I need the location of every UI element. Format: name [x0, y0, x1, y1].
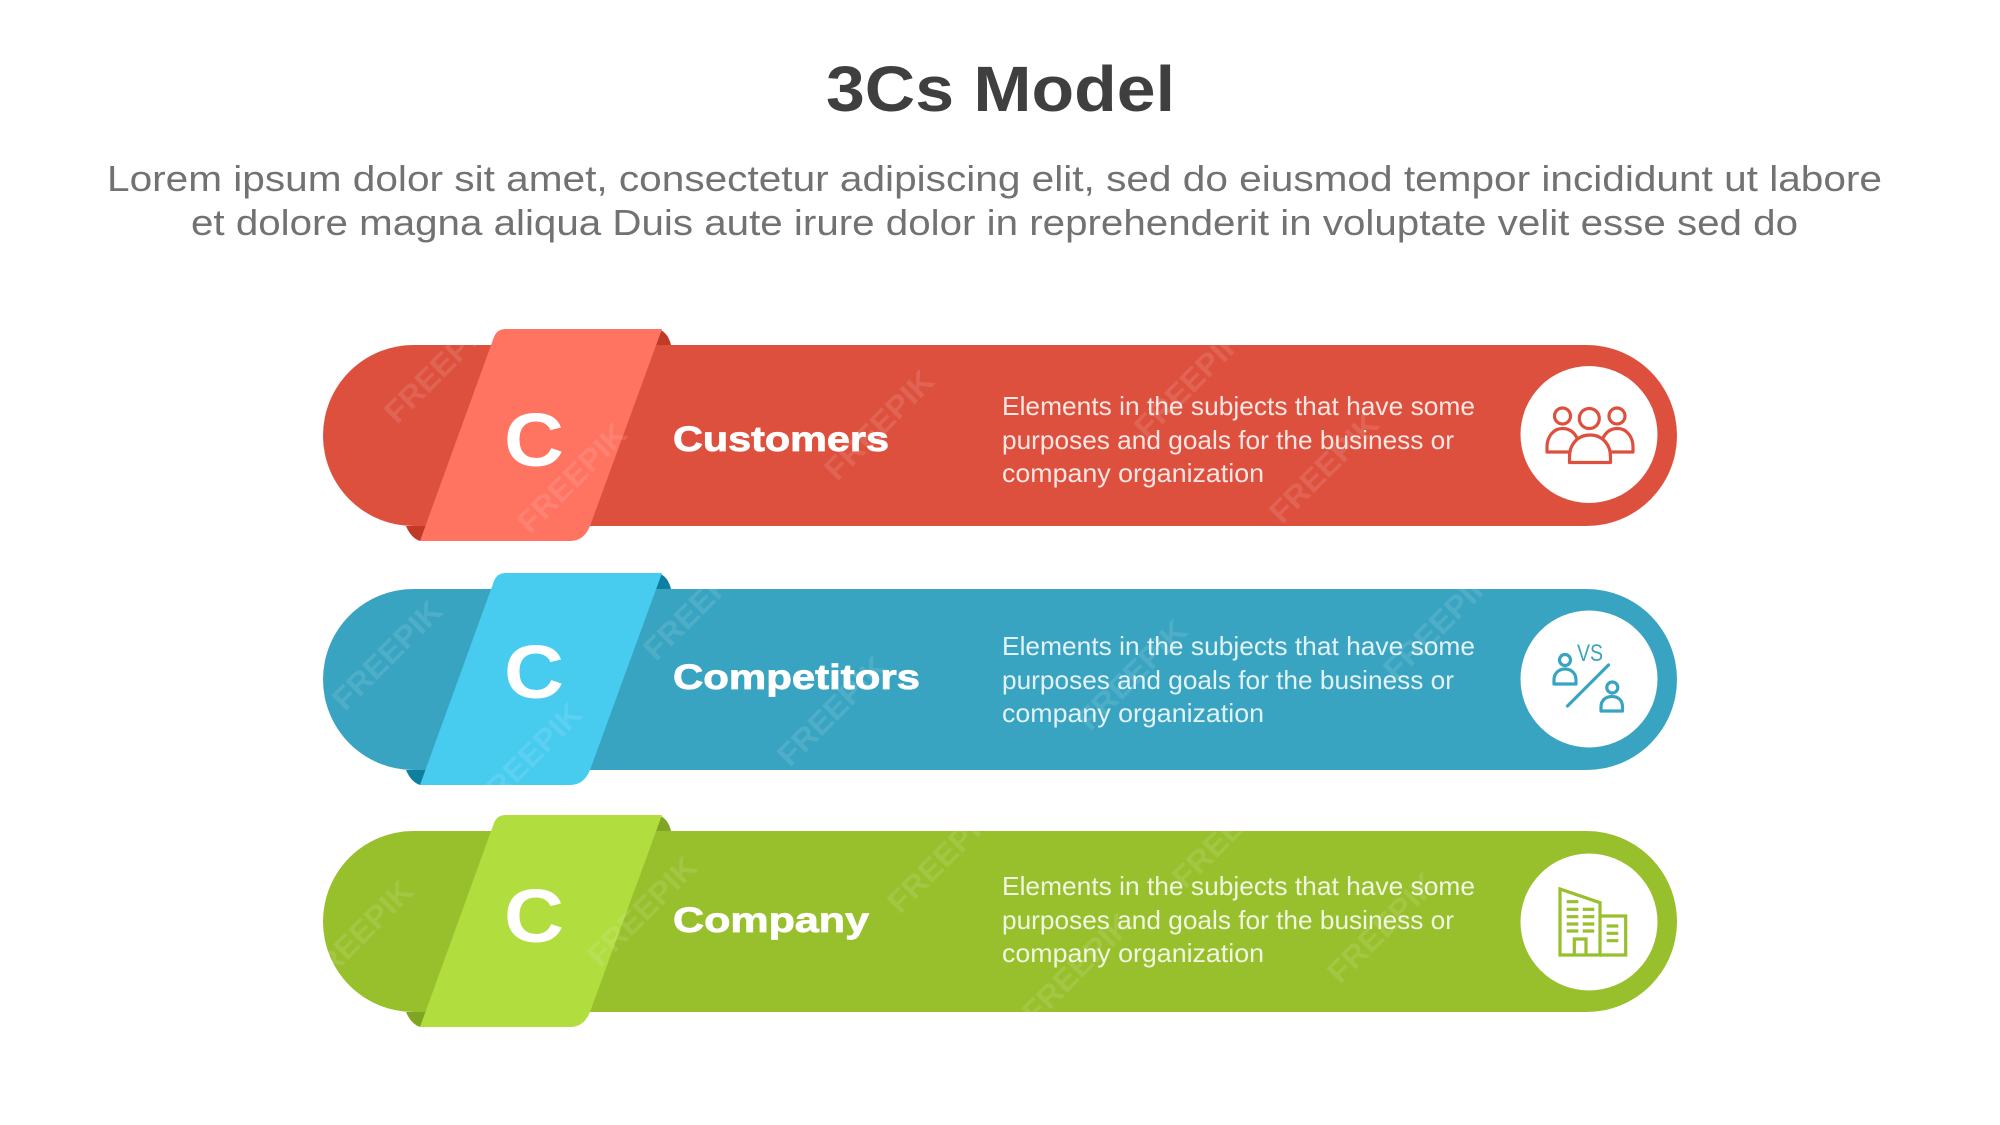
description: company: company organization — [1002, 938, 1264, 968]
watermarks: company: FREEPIK — [296, 873, 420, 997]
description: competitors: Elements in the subjects that have some — [1002, 631, 1475, 661]
watermarks: competitors: FREEPIK — [465, 696, 589, 820]
watermarks: customers: FREEPIK — [510, 416, 634, 540]
ribbon: company — [420, 815, 662, 1027]
description: company: purposes and goals for the business or — [1002, 905, 1454, 935]
icon: people group — [1547, 408, 1633, 462]
icon circle: company — [1520, 854, 1658, 990]
ribbon: competitors — [420, 573, 662, 785]
bar: competitors — [323, 589, 1677, 770]
description: competitors — [1002, 631, 1475, 728]
watermarks: customers — [377, 306, 1386, 540]
description: customers — [1002, 391, 1475, 488]
icon circle: competitors — [1520, 610, 1658, 748]
subtitle text: Lorem ipsum dolor sit amet, consectetur adipiscing elit, sed do eiusmod tempor incididunt ut labore — [107, 158, 1882, 199]
ribbon fold top: company — [654, 815, 671, 831]
ribbon fold top: competitors — [654, 573, 671, 589]
watermarks: competitors: FREEPIK — [636, 543, 760, 667]
panel: competitors — [323, 543, 1677, 820]
letter C: customers: C — [504, 398, 564, 482]
ribbon: customers — [420, 329, 662, 541]
watermarks: competitors — [325, 543, 1500, 820]
description: competitors: purposes and goals for the business or — [1002, 665, 1454, 695]
watermarks: company: FREEPIK — [1320, 866, 1444, 990]
title: 3Cs Model — [826, 53, 1175, 125]
icon circle: customers — [1520, 366, 1658, 503]
panel: company — [296, 771, 1677, 1030]
watermarks: company: FREEPIK — [1165, 771, 1289, 895]
watermarks: company: FREEPIK — [880, 796, 1004, 920]
description: customers: purposes and goals for the business or — [1002, 425, 1454, 455]
ribbon fold bottom: competitors — [406, 770, 428, 785]
label: competitors: Competitors — [673, 658, 920, 697]
ribbon fold bottom: customers — [406, 526, 428, 541]
watermarks: customers: FREEPIK — [1262, 406, 1386, 530]
subtitle text — [107, 158, 1882, 243]
watermarks: competitors: FREEPIK — [325, 593, 449, 717]
description: competitors: company organization — [1002, 698, 1264, 728]
label: customers: Customers — [673, 420, 889, 459]
watermarks: company: FREEPIK — [580, 849, 704, 973]
description: customers: Elements in the subjects that have some — [1002, 391, 1475, 421]
panel: customers — [323, 306, 1677, 541]
subtitle text: et dolore magna aliqua Duis aute irure dolor in reprehenderit in voluptate velit esse sed do — [191, 202, 1798, 243]
icon: office building — [1560, 889, 1626, 955]
watermarks: customers: FREEPIK — [1127, 321, 1251, 445]
description: customers: company organization — [1002, 458, 1264, 488]
watermarks: customers: FREEPIK — [817, 363, 941, 487]
watermarks: company: FREEPIK — [1015, 906, 1139, 1030]
icon: versus people: VS — [1577, 640, 1603, 667]
watermarks: competitors: FREEPIK — [770, 649, 894, 773]
ribbon fold bottom: company — [406, 1012, 428, 1027]
watermarks: customers: FREEPIK — [377, 306, 501, 430]
watermarks: company — [296, 771, 1444, 1030]
ribbon fold top: customers — [654, 329, 671, 345]
watermarks: competitors: FREEPIK — [1070, 613, 1194, 737]
description: company: Elements in the subjects that have some — [1002, 871, 1475, 901]
watermarks: competitors: FREEPIK — [1376, 563, 1500, 687]
label: company: Company — [673, 901, 870, 940]
icon: versus people — [1554, 640, 1622, 711]
bar: customers — [323, 345, 1677, 526]
letter C: company: C — [504, 874, 564, 958]
bar: company — [323, 831, 1677, 1012]
description: company — [1002, 871, 1475, 968]
letter C: competitors: C — [504, 630, 564, 714]
